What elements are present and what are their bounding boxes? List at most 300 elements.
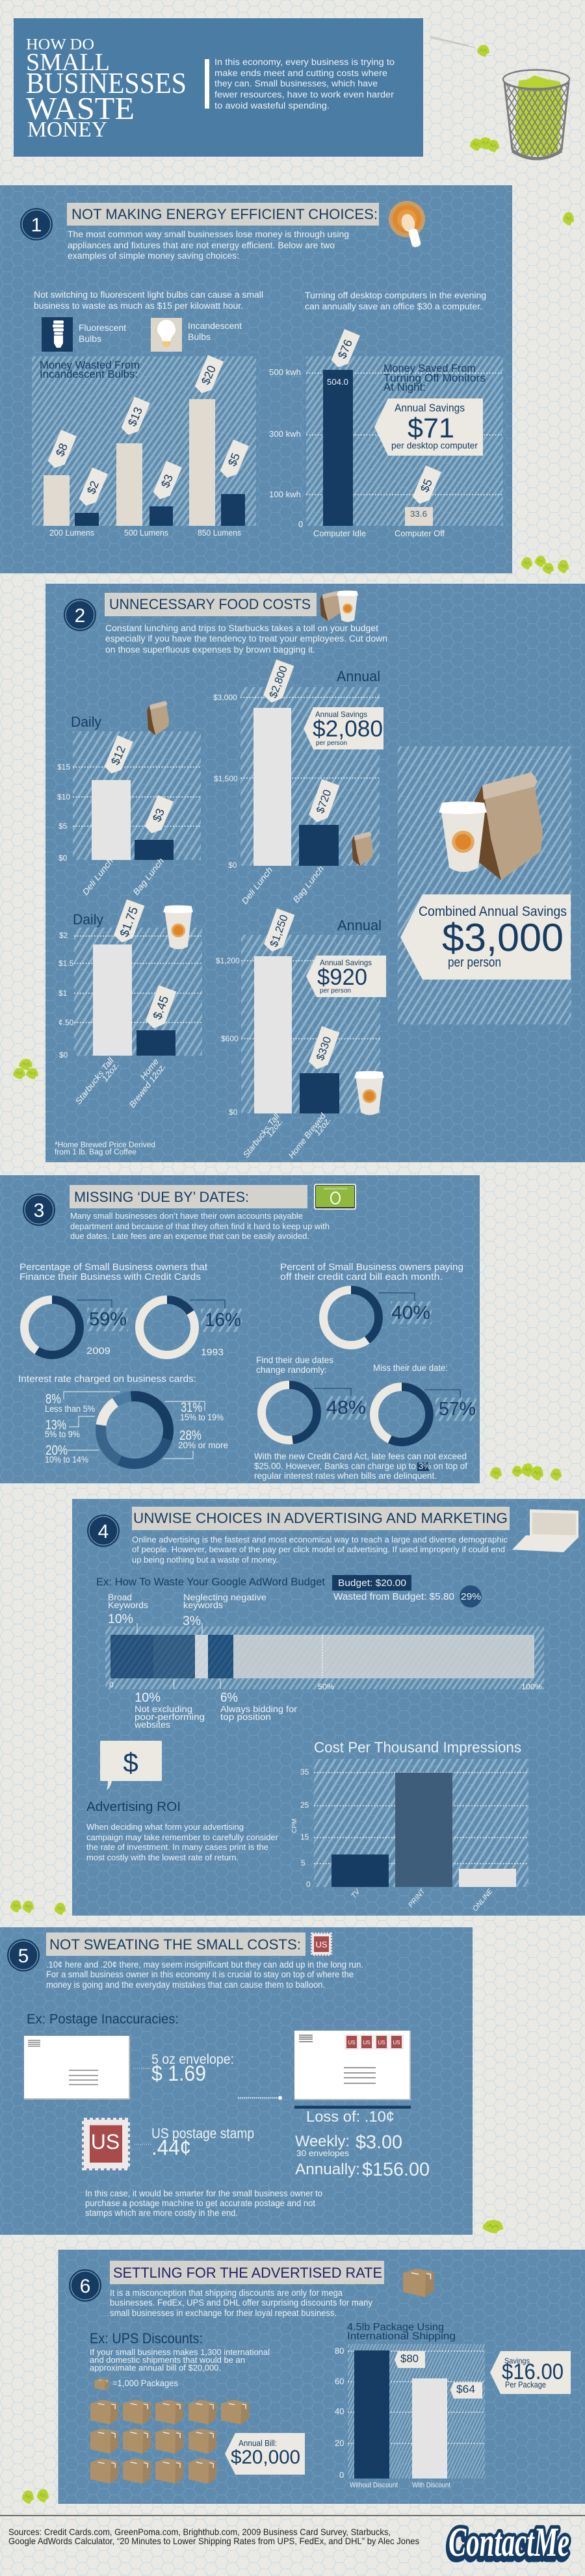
intro text: The most common way small businesses lose money is through using — [68, 229, 349, 239]
intro text: Online advertising is the fastest and most economical way to reach a large and diverse demographic — [132, 1535, 508, 1544]
bar chart: monitors: Money Saved From — [384, 362, 476, 374]
heading — [105, 593, 317, 616]
donut chart: interest rates: 20% — [46, 1443, 68, 1458]
bar chart: annual coffee: 12oz. — [265, 1116, 285, 1139]
heading: MISSING ‘DUE BY’ DATES: — [74, 1189, 249, 1205]
label: paying off — [280, 1262, 463, 1282]
intro text: to avoid wasteful spending. — [214, 101, 330, 111]
bar chart: daily coffee: Starbucks Tall — [73, 1055, 116, 1106]
closing text: purchase a postage machine to get accurate postage and not — [85, 2198, 315, 2208]
number 2: 2 — [75, 605, 85, 627]
icon: credit card — [314, 1184, 356, 1210]
icon: fluorescent bulb legend: Bulbs — [79, 333, 101, 344]
icon: envelope with stamps: US — [363, 2040, 370, 2046]
advertising roi text: the rate of investment. In many cases print is the — [86, 1842, 268, 1852]
loss figures: Annually: — [295, 2161, 360, 2178]
bar chart: annual coffee: Starbucks Tall — [241, 1111, 282, 1160]
icon: incandescent bulb legend — [151, 318, 242, 352]
donut: 40% — [324, 1290, 432, 1346]
donut: 57% — [373, 1362, 476, 1442]
stacked bar: budget waste — [105, 1593, 544, 1730]
icon: paper balls — [521, 556, 569, 574]
title — [26, 36, 187, 142]
bar chart: annual coffee: Annual — [337, 917, 382, 933]
intro text: especially if you have the tendency to treat your employees. Cut down — [105, 634, 387, 644]
bar chart: monitors: At Night: — [384, 381, 426, 393]
intro text: .10¢ here and .20¢ there, may seem insignificant but they can add up in the long run. — [46, 1960, 363, 1970]
bar chart: daily lunch: $15 — [57, 762, 70, 772]
label: financing: Percentage of Small Business owners that — [20, 1262, 208, 1273]
donut chart: interest rates: 10% to 14% — [45, 1454, 88, 1464]
bar chart: money wasted: $20 — [199, 363, 218, 387]
panel: section 5 small costs — [0, 1927, 473, 2235]
intro text: In this economy, every business is trying to — [214, 57, 395, 67]
callout: annual bill: $20,000 — [231, 2447, 300, 2468]
bar chart: international shipping: 0 — [339, 2470, 344, 2480]
bar chart: annual lunch: Bag Lunch — [291, 864, 326, 905]
icon: stamp small: US — [315, 1940, 328, 1949]
ups discount text — [90, 2330, 270, 2373]
intro text: make ends meet and cutting costs where — [214, 68, 387, 78]
stacked bar: budget waste: 50% — [318, 1682, 334, 1691]
bar chart: monitors: Turning Off Monitors — [384, 372, 486, 384]
bar chart: international shipping: International Shipping — [347, 2331, 456, 2342]
callout: combined savings: per person — [448, 956, 501, 970]
bar chart: annual lunch: $1,500 — [214, 774, 238, 783]
bar chart: annual lunch: $3,000 — [213, 693, 237, 702]
donut chart: interest rates: 31% — [181, 1400, 202, 1415]
bar chart: daily coffee: $1 — [58, 989, 68, 998]
intro text: department and because of that they often find it hard to keep up with — [70, 1222, 330, 1231]
label: stamp price: US postage stamp — [151, 2126, 254, 2141]
stacked bar: budget waste: websites — [134, 1720, 170, 1730]
intro text — [110, 2288, 372, 2318]
title: HOW DO — [26, 36, 94, 53]
number 3: 3 — [34, 1200, 44, 1221]
budget label — [332, 1575, 411, 1591]
note: credit card act: With the new Credit Card Act, late fees can not exceed — [254, 1451, 467, 1461]
intro text: they can. Small businesses, which have — [214, 79, 378, 88]
heading: SETTLING FOR THE ADVERTISED RATE — [113, 2265, 382, 2281]
bar chart: cost per thousand impressions: 5 — [301, 1858, 306, 1867]
bar chart: money wasted — [32, 355, 256, 538]
icon: incandescent bulb legend: Incandescent — [188, 320, 242, 331]
closing text — [85, 2189, 322, 2218]
intro text: on those superfluous expenses by brown bagging it. — [105, 645, 315, 655]
title: WASTE — [26, 90, 135, 126]
icon: large stamp: US — [91, 2130, 120, 2153]
donut: 57%: Miss their due date: — [373, 1362, 448, 1373]
intro text: fewer resources, have to work even harder — [214, 90, 395, 99]
donut chart: interest rates: 13% — [46, 1418, 66, 1433]
bar chart: monitors: 300 kwh — [269, 429, 301, 439]
bar chart: cost per thousand impressions: PRINT — [407, 1887, 427, 1909]
bar chart: annual lunch: Annual — [337, 668, 380, 684]
bar chart: money wasted: $8 — [53, 441, 70, 458]
panel: section 2 food — [46, 584, 585, 1162]
intro text: Constant lunching and trips to Starbucks takes a toll on your budget — [105, 623, 378, 633]
bar chart: money wasted: $2 — [84, 479, 101, 496]
bar chart: cost per thousand impressions: TV — [350, 1887, 362, 1900]
callout: combined savings: $3,000 — [442, 916, 564, 959]
bar chart: daily coffee: $0 — [59, 1050, 68, 1060]
heading: UNWISE CHOICES IN ADVERTISING AND MARKETING — [133, 1510, 508, 1526]
footer rule — [0, 2515, 585, 2516]
bar chart: monitors: Computer Off — [395, 528, 445, 538]
callout: savings per package: Savings — [504, 2356, 530, 2365]
intro text: of people. However, beware of the pay per click model of advertising. If used improperly if could end — [132, 1544, 505, 1554]
bar chart: monitors: $76 — [335, 337, 355, 361]
bar chart: daily coffee: $.45 — [151, 994, 172, 1021]
bar chart: annual lunch: $720 — [314, 788, 333, 815]
intro text: small businesses in exchange for their loyal repeat business. — [110, 2308, 337, 2318]
stacked bar: budget waste: Broad — [108, 1593, 132, 1602]
bar chart: international shipping: Without Discount — [350, 2482, 398, 2490]
bar chart: daily coffee: $2 — [59, 931, 68, 940]
bar chart: money wasted: 500 Lumens — [124, 528, 168, 538]
icon: fluorescent bulb legend — [42, 317, 126, 352]
bar chart: money wasted: Incandescent Bulbs: — [40, 368, 138, 380]
bar chart: annual coffee — [216, 909, 386, 1160]
donut chart: interest rates: 5% to 9% — [45, 1429, 80, 1439]
intro text — [132, 1535, 508, 1565]
callout: $2,080: $2,080 — [313, 716, 383, 742]
number 4: 4 — [98, 1521, 109, 1542]
icon: envelope with stamps: US — [393, 2040, 400, 2046]
icon: paper balls left — [13, 1059, 38, 1079]
callout: annual savings $71: Annual Savings — [395, 402, 465, 414]
bar chart: international shipping: 80 — [335, 2346, 344, 2356]
callout: annual savings $71: per desktop computer — [391, 440, 478, 450]
icon: bag and cup — [320, 590, 358, 622]
bar chart: annual coffee: $0 — [229, 1108, 238, 1117]
bar chart: monitors: 0 — [298, 519, 303, 529]
icon: speech bubble dollar — [100, 1741, 162, 1790]
donut chart: interest rates: 28% — [179, 1428, 202, 1443]
icon: trash can with paper — [430, 36, 574, 226]
bar chart: money wasted: 850 Lumens — [198, 528, 241, 538]
bar chart: cost per thousand impressions: ONLINE — [471, 1887, 495, 1913]
callout: annual bill — [225, 2433, 305, 2475]
bar chart: international shipping: 60 — [335, 2376, 344, 2386]
intro text — [205, 57, 395, 111]
heading — [110, 2261, 384, 2284]
bar chart: international shipping — [335, 2322, 485, 2490]
number 6 — [69, 2269, 101, 2302]
legend: packages — [95, 2378, 178, 2390]
footnote — [55, 1141, 155, 1156]
stacked bar: budget waste: 100% — [521, 1682, 542, 1691]
bar chart: daily coffee: ¢.50 — [58, 1018, 74, 1027]
bar chart: cost per thousand impressions: 0 — [306, 1880, 311, 1889]
heading: UNNECESSARY FOOD COSTS — [109, 596, 311, 612]
icon: envelope with stamps: US — [348, 2040, 356, 2046]
callout: $920: $920 — [317, 965, 367, 990]
bar chart: money wasted: $3 — [159, 473, 176, 489]
label: financing — [20, 1262, 208, 1282]
donut: 1993 16%: 1993 — [201, 1347, 224, 1358]
sources: Google AdWords Calculator, “20 Minutes to Lower Shipping Rates from UPS, FedEx, and DHL” by Alec Jones — [8, 2536, 419, 2546]
bar chart: cost per thousand impressions: Cost Per Thousand Impressions — [314, 1739, 521, 1756]
sources: Sources: Credit Cards.com, GreenPoma.com, Brighthub.com, 2009 Business Card Survey, Starbucks, — [8, 2527, 391, 2537]
right text: Turning off desktop computers in the evening — [305, 291, 486, 300]
icon: paper balls bottom — [22, 2489, 49, 2504]
icon: speech bubble dollar: $ — [123, 1747, 138, 1778]
number 5: 5 — [18, 1945, 29, 1967]
wasted label: Wasted from Budget: $5.80 — [333, 1591, 454, 1602]
label: envelope price — [133, 2052, 234, 2085]
bar chart: monitors — [269, 329, 503, 538]
intro text: up being nothing but a waste of money. — [132, 1555, 278, 1565]
number 4 — [87, 1515, 120, 1547]
bar chart: daily lunch: $5 — [58, 822, 68, 831]
callout: $920: per person — [320, 987, 351, 995]
stacked bar: budget waste: keywords — [183, 1600, 223, 1610]
advertising roi text: most costly with the lowest rate of return. — [86, 1853, 239, 1862]
number 1: 1 — [31, 215, 42, 236]
icon: stamp small — [312, 1934, 331, 1955]
callout: annual savings $71: $71 — [408, 413, 454, 444]
bar chart: daily lunch: $3 — [150, 807, 167, 824]
bar chart: daily lunch: Deli Lunch — [81, 856, 115, 897]
right text — [305, 291, 486, 311]
ups discount text: approximate annual bill of $20,000. — [90, 2363, 221, 2373]
icon grid: packages — [90, 2400, 249, 2484]
bar chart: daily coffee: Brewed 12oz. — [127, 1061, 168, 1110]
stacked bar: budget waste: 10% — [135, 1691, 161, 1705]
bar chart: annual lunch: Deli Lunch — [240, 865, 274, 906]
donut: 2009 59%: 59% — [89, 1309, 127, 1330]
callout: combined savings — [398, 746, 571, 1024]
callout: $2,080: Annual Savings — [315, 710, 367, 719]
heading — [70, 1185, 307, 1208]
panel: section 6 shipping — [58, 2250, 585, 2504]
advertising roi text: Advertising ROI — [86, 1800, 181, 1814]
intro text: due dates. Late fees are an expense that can be easily avoided. — [70, 1232, 309, 1241]
bar chart: cost per thousand impressions: 15 — [300, 1832, 309, 1841]
stacked bar: budget waste: Not excluding — [135, 1704, 192, 1714]
donut: 1993 16%: 16% — [205, 1310, 241, 1331]
donut chart: interest rates: 8% — [46, 1392, 61, 1407]
label: envelope price: 5 oz envelope: — [151, 2052, 234, 2067]
title: BUSINESSES — [26, 67, 187, 99]
icon: paper ball — [482, 2220, 503, 2233]
intro text: money is going and the everyday mistakes that can cause them to balloon. — [46, 1980, 325, 1990]
icon: incandescent bulb legend: Bulbs — [188, 332, 211, 342]
bar chart: cost per thousand impressions: 25 — [300, 1801, 309, 1810]
bar chart: annual lunch — [213, 660, 384, 906]
icon: large stamp — [84, 2120, 128, 2168]
bar chart: daily lunch: Daily — [71, 714, 101, 730]
bar chart: money wasted: 200 Lumens — [49, 528, 94, 538]
legend: packages: =1,000 Packages — [112, 2378, 178, 2388]
label: financing: Finance their Business with Credit Cards — [20, 1271, 201, 1282]
heading — [46, 1932, 306, 1956]
title: SMALL — [26, 49, 110, 76]
icon: paper balls left lower — [10, 1900, 66, 1915]
left text: business to waste as much as $15 per kilowatt hour. — [34, 301, 243, 311]
advertising roi text — [86, 1800, 279, 1862]
loss figures: Loss of: .10¢ — [306, 2108, 395, 2125]
closing text: stamps which are more costly in the end. — [85, 2208, 238, 2218]
callout: $2,080: per person — [316, 740, 347, 747]
bar chart: monitors: $5 — [418, 477, 435, 494]
note: credit card act: regular interest rates when bills are delinquent. — [254, 1470, 437, 1481]
loss figures: Weekly: — [295, 2133, 350, 2150]
donut: 48%: change randomly: — [256, 1364, 327, 1375]
bar chart: monitors: Computer Idle — [313, 528, 366, 538]
bar chart: monitors: 504.0 — [327, 377, 348, 387]
heading: NOT SWEATING THE SMALL COSTS: — [49, 1936, 301, 1953]
intro text: appliances and fixtures that are not energy efficient. Below are two — [68, 241, 335, 250]
loss figures: $3.00 — [356, 2132, 402, 2153]
callout: $920: Annual Savings — [320, 958, 372, 967]
label: stamp price: .44¢ — [151, 2135, 191, 2159]
callout: annual bill: Annual Bill: — [239, 2438, 277, 2448]
callout: $2,080 — [304, 707, 384, 749]
icon: envelope plain — [24, 2036, 130, 2100]
bar chart: daily coffee — [58, 900, 202, 1110]
stacked bar: budget waste: poor-performing — [135, 1712, 205, 1722]
intro text — [70, 1212, 330, 1241]
donut chart: interest rates — [18, 1373, 228, 1477]
label: paying off: Percent of Small Business owners paying — [280, 1262, 463, 1273]
callout: annual savings $71 — [374, 398, 483, 456]
loss figures: $156.00 — [362, 2159, 430, 2180]
header panel — [14, 18, 423, 157]
bar chart: daily lunch: $10 — [57, 792, 70, 801]
stacked bar: budget waste: Neglecting negative — [183, 1593, 266, 1602]
callout: savings per package: Per Package — [505, 2380, 546, 2389]
number 5 — [7, 1939, 40, 1971]
stacked bar: budget waste: top position — [220, 1712, 271, 1722]
bar chart: daily lunch — [57, 701, 201, 897]
icon: hand bulb — [389, 201, 425, 248]
intro text — [105, 623, 387, 655]
bar chart: international shipping: 20 — [335, 2438, 344, 2448]
callout: savings per package — [490, 2351, 571, 2394]
intro text — [46, 1960, 363, 1990]
bar chart: monitors: 33.6 — [410, 509, 427, 519]
bar chart: international shipping: 40 — [335, 2406, 344, 2416]
icon: fluorescent bulb legend: Fluorescent — [79, 322, 126, 333]
bar chart: annual coffee: $1,200 — [216, 956, 240, 965]
bar chart: daily coffee: $1.5 — [58, 959, 74, 968]
bar chart: annual coffee: Home Brewed — [287, 1111, 328, 1160]
donut: 48%: 48% — [326, 1398, 366, 1418]
right text: can annually save an office $30 a computer. — [305, 302, 482, 311]
panel: section 3 due dates — [0, 1175, 480, 1483]
heading — [67, 203, 379, 226]
bar chart: cost per thousand impressions — [291, 1739, 528, 1913]
ups discount text: If your small business makes 1,300 international — [90, 2347, 270, 2357]
panel: section 1 energy — [0, 185, 512, 573]
donut chart: interest rates: Interest rate charged on business cards: — [18, 1373, 196, 1385]
sources — [8, 2527, 419, 2546]
bar chart: annual lunch: $0 — [228, 861, 237, 870]
donut: 40%: 40% — [391, 1303, 430, 1323]
advertising roi text: When deciding what form your advertising — [86, 1822, 244, 1832]
callout: combined savings: Combined Annual Savings — [419, 904, 567, 919]
donut chart: interest rates: 15% to 19% — [180, 1412, 224, 1422]
icon: credit card: AMERICAN EXPRESS — [324, 1188, 348, 1190]
callout: $920 — [306, 956, 386, 997]
intro text: For a small business owner in this economy it is crucial to stay on top of where the — [46, 1970, 354, 1979]
stacked bar: budget waste: 10% — [108, 1612, 133, 1626]
note: credit card act — [254, 1451, 467, 1481]
footnote: from 1 lb. Bag of Coffee — [55, 1149, 136, 1156]
bar chart: annual coffee: $600 — [221, 1034, 239, 1043]
number 6: 6 — [80, 2276, 90, 2297]
ups discount text: Ex: UPS Discounts: — [90, 2330, 203, 2347]
stacked bar: budget waste: 3% — [183, 1614, 201, 1628]
title: MONEY — [27, 118, 107, 142]
bar chart: daily coffee: $1.75 — [118, 905, 141, 939]
label: paying off: off their credit card bill each month. — [280, 1271, 443, 1282]
icon: paper balls right — [490, 1463, 562, 1481]
donut: 48% — [256, 1355, 367, 1440]
bar chart: daily coffee: 12oz. — [100, 1060, 121, 1084]
intro text: businesses. FedEx, UPS and DHL offer surprising discounts for many — [110, 2298, 372, 2308]
arrow — [239, 2096, 282, 2100]
stacked bar: budget waste: 6% — [220, 1691, 238, 1705]
intro text — [68, 229, 349, 261]
donut: 1993 16% — [139, 1300, 242, 1358]
bar chart: daily coffee: Daily — [73, 911, 103, 928]
footnote: *Home Brewed Price Derived — [55, 1141, 155, 1149]
intro text: It is a misconception that shipping discounts are only for mega — [110, 2288, 343, 2298]
bar chart: annual coffee: 12oz. — [313, 1115, 333, 1138]
bar chart: monitors: 100 kwh — [269, 489, 301, 499]
bar chart: money wasted: $13 — [125, 405, 145, 428]
label: stamp price — [135, 2126, 254, 2159]
bar chart: daily lunch: Bag Lunch — [131, 856, 166, 897]
bar chart: monitors: 500 kwh — [269, 367, 301, 377]
bar chart: international shipping: $80 — [400, 2352, 419, 2365]
advertising roi text: campaign may take remember to carefully consider — [86, 1832, 279, 1842]
label: envelope price: $ 1.69 — [151, 2061, 206, 2085]
budget label: Budget: $20.00 — [338, 1578, 406, 1589]
stacked bar: budget waste: Keywords — [108, 1600, 148, 1610]
bar chart: daily coffee: Home — [138, 1056, 161, 1082]
wasted label: 29% — [461, 1591, 481, 1602]
bar chart: international shipping: 4.5lb Package Using — [347, 2322, 444, 2333]
number 1 — [20, 208, 53, 241]
donut: 57%: 57% — [439, 1399, 476, 1420]
loss figures: 30 envelopes — [296, 2148, 350, 2158]
intro text: Many small businesses don’t have their own accounts payable — [70, 1212, 303, 1221]
bar chart: money wasted: $5 — [226, 451, 242, 468]
donut: 48%: Find their due dates — [256, 1355, 333, 1365]
bar chart: annual coffee: $330 — [314, 1035, 333, 1062]
note: credit card act: $25.00. However, Banks can charge up to 3% on top of — [254, 1461, 467, 1471]
icon: parcel — [403, 2269, 434, 2297]
donut chart: interest rates: 20% or more — [178, 1440, 228, 1450]
wasted label — [333, 1585, 482, 1607]
bar chart: international shipping: With Discount — [412, 2482, 450, 2490]
donut: 2009 59% — [25, 1300, 128, 1357]
subheading: postage: Ex: Postage Inaccuracies: — [27, 2012, 179, 2027]
heading: NOT MAKING ENERGY EFFICIENT CHOICES: — [72, 206, 378, 222]
bar chart: annual lunch: $2,800 — [266, 664, 290, 699]
stacked bar: budget waste: 0 — [109, 1680, 114, 1689]
icon: envelope with stamps — [294, 2031, 411, 2100]
icon: laptop — [512, 1509, 578, 1552]
icon: envelope with stamps: US — [378, 2040, 385, 2046]
donut: 2009 59%: 2009 — [86, 1346, 110, 1357]
callout: savings per package: $16.00 — [502, 2360, 564, 2384]
stacked bar: budget waste: Always bidding for — [220, 1704, 298, 1714]
